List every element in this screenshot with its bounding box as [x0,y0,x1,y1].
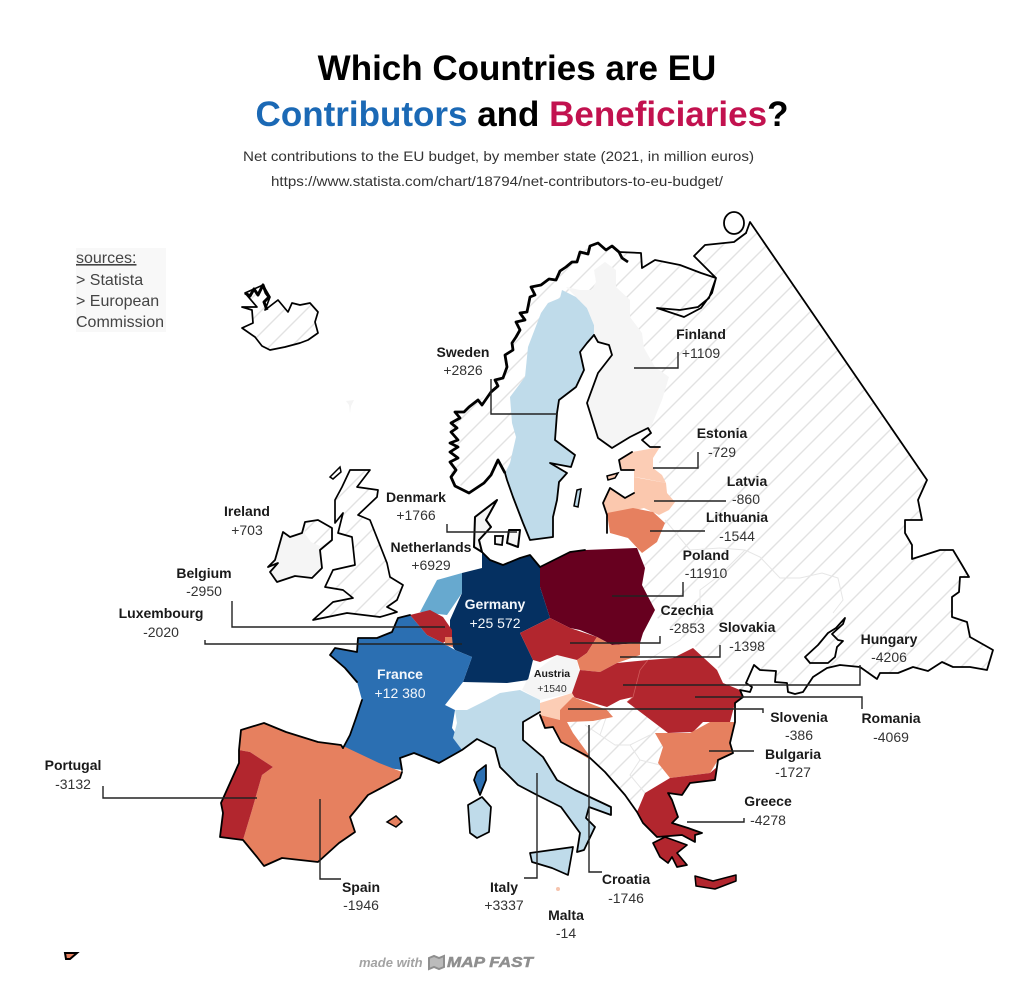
non-EU mainland: Norway, Russia, Belarus, Ukraine [450,222,993,694]
label: Latvia: Latvia [727,473,767,489]
Faroe Islands [346,400,354,413]
Balkan and eastern borders [585,520,843,793]
label: Croatia: -1746 [608,890,644,906]
Portugal [220,750,273,840]
subtitle [243,148,754,189]
label: Slovenia: Slovenia [770,709,828,725]
label: Croatia [602,871,650,906]
label: Bulgaria: Bulgaria [765,746,821,762]
Gotland [574,489,581,507]
label: Slovakia [719,619,776,654]
Corsica [474,765,486,795]
label: Slovenia [770,709,828,743]
France [330,615,472,770]
label: Romania [861,710,921,745]
label: Denmark [386,489,446,523]
label: Romania: Romania [861,710,921,726]
Latvia [603,477,675,515]
Great Britain [313,470,403,620]
Bulgaria [655,722,735,778]
label: Poland: -11910 [685,565,727,581]
coastlines [220,212,993,866]
Ireland [268,520,332,582]
Belgium [410,610,452,643]
credit: made with Map Fast: MAP FAST [447,954,535,971]
Switzerland [445,680,527,710]
title [256,49,788,134]
label: Finland: Finland [676,326,726,342]
label: Sweden: +2826 [443,362,483,378]
Hungary [572,660,648,707]
Netherlands [420,573,462,615]
Ireland coastline [268,520,332,582]
label: Austria: Austria [534,668,570,680]
label: Spain: -1946 [343,897,379,913]
label: Netherlands: +6929 [411,557,451,573]
label: Poland: Poland [683,547,729,563]
credit: made with Map Fast [359,954,535,971]
subtitle: https://www.statista.com/chart/18794/net-contributors-to-eu-budget/ [271,173,723,189]
label: Czechia: -2853 [669,620,705,636]
title: Which Countries are EU [318,49,716,88]
Croatia [540,697,613,759]
sources box: sources: [76,250,136,267]
label: Hungary [861,631,918,665]
label: Slovakia: -1398 [729,638,765,654]
label: France: France [377,666,423,682]
Balearic island [387,816,402,827]
Canary island [65,953,77,959]
label: Luxembourg [119,605,203,640]
label: Spain [342,879,380,913]
label: Belgium: Belgium [176,565,232,581]
label: Finland [676,326,726,361]
Luxembourg [445,637,453,647]
label: Greece: -4278 [750,812,786,828]
Hungary–Romania border [627,660,648,702]
label: Hungary: Hungary [861,631,918,647]
Iceland north-west fjords [245,285,269,310]
label: Sweden [437,344,489,378]
Romania [627,648,743,733]
label: Portugal: Portugal [45,757,101,773]
label: Italy: Italy [490,879,518,895]
small Scottish island [330,467,341,479]
label: Romania: -4069 [873,729,909,745]
Austria [522,655,580,700]
label: Germany: Germany [465,596,526,612]
label: Hungary: -4206 [871,649,907,665]
label: Austria [534,668,570,695]
label: Spain: Spain [342,879,380,895]
Crete [695,875,736,889]
label: Greece: Greece [744,793,792,809]
label: Lithuania [706,509,768,544]
label: Lithuania: Lithuania [706,509,768,525]
label: Estonia: Estonia [697,425,747,441]
label: Portugal [45,757,101,792]
Saaremaa [607,473,618,480]
label: Denmark: Denmark [386,489,446,505]
label: Luxembourg: Luxembourg [119,605,203,621]
label: France [374,666,426,701]
label: Ireland [224,503,270,538]
label: Greece [744,793,792,828]
label: Austria: +1540 [537,683,567,695]
label: Belgium: -2950 [186,583,222,599]
Sicily [530,847,573,875]
label: Italy: +3337 [484,897,524,913]
label: Germany [465,596,526,631]
label: Czechia: Czechia [661,602,714,618]
Iceland [242,285,318,350]
label: Ireland: +703 [231,522,263,538]
Czechia [520,618,597,662]
sources box [76,248,166,332]
label: Ireland: Ireland [224,503,270,519]
label: France: +12 380 [374,685,426,701]
label: Slovenia: -386 [785,727,813,743]
map [65,212,993,959]
label: Bulgaria [765,746,821,780]
sources box: > European [76,293,159,310]
Italy [453,690,611,852]
Germany [450,552,550,683]
label: Estonia: -729 [708,444,736,460]
label: Malta: -14 [556,925,576,941]
label: Malta: Malta [548,907,584,923]
label: Poland [683,547,729,581]
Slovenia [540,693,575,720]
Balkans, hatched non-EU [567,702,670,812]
sources box: Commission [76,314,164,331]
title: Contributors and Beneficiaries? [256,95,788,134]
label: Finland: +1109 [682,345,720,361]
Malta [556,887,560,891]
label: Latvia: -860 [732,491,760,507]
label: Italy [484,879,524,913]
label: Bulgaria: -1727 [775,764,811,780]
label: Croatia: Croatia [602,871,650,887]
Estonia [619,447,666,483]
label: Malta [548,907,584,941]
credit: made with Map Fast: made with [359,955,423,970]
label: Denmark: +1766 [396,507,436,523]
label: Slovakia: Slovakia [719,619,776,635]
label: Netherlands [391,539,472,573]
Poland [540,548,655,645]
label: Netherlands: Netherlands [391,539,472,555]
label: Czechia [661,602,714,636]
label: Portugal: -3132 [55,776,91,792]
Sweden [505,290,594,540]
Zealand [507,530,520,547]
sources box: > Statista [76,272,143,289]
Funen [495,536,503,545]
leader lines [103,352,862,879]
icon: map [429,956,444,969]
label: Luxembourg: -2020 [143,624,179,640]
label: Germany: +25 572 [470,615,521,631]
Denmark [474,500,497,552]
Finland [566,262,669,448]
Northern Ireland [305,520,332,546]
label: Estonia [697,425,747,460]
subtitle: Net contributions to the EU budget, by member state (2021, in million euros) [243,148,754,164]
Greece mainland [637,767,717,842]
Lithuania [607,508,665,553]
label: Belgium [176,565,232,599]
label: Lithuania: -1544 [719,528,755,544]
label: Sweden: Sweden [437,344,489,360]
Sardinia [468,797,491,838]
Spain [239,723,402,866]
label: Latvia [727,473,767,507]
Peloponnese [653,837,687,867]
Slovakia [577,637,640,672]
